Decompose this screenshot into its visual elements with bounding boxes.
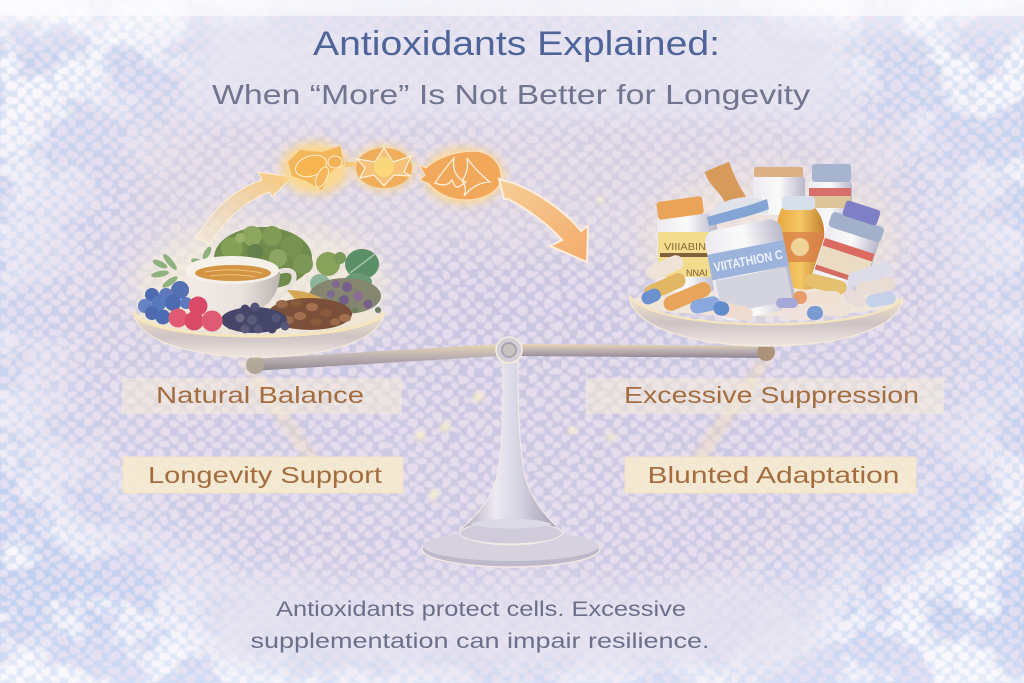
label: Blunted Adaptation: Blunted Adaptation bbox=[648, 462, 900, 488]
label: Excessive Suppression bbox=[586, 378, 944, 414]
arrow: right descending arrow bbox=[499, 179, 588, 262]
coffee beans bbox=[268, 298, 352, 330]
subtitle: When “More” Is Not Better for Longevity bbox=[212, 79, 810, 110]
herbs: rosemary sprig bbox=[151, 245, 216, 290]
left pan: natural foods bbox=[132, 225, 392, 357]
scale: stand, base and beam bbox=[246, 337, 775, 567]
icon: seed cluster bbox=[281, 142, 349, 194]
dark berries bbox=[221, 302, 290, 334]
arrow: left glowing arc bbox=[196, 172, 292, 244]
light rays under the labels bbox=[236, 360, 772, 458]
connector bbox=[345, 162, 361, 167]
arrow: transformation arc from food to supplements bbox=[196, 142, 588, 262]
bottle: red label back right bbox=[808, 164, 852, 240]
stand column bbox=[460, 362, 560, 545]
bottle: purple cap tilted bbox=[810, 197, 890, 296]
icon: cell with crossed strands bbox=[419, 148, 504, 204]
raspberries bbox=[168, 296, 222, 332]
label: Natural Balance: Natural Balance bbox=[156, 382, 364, 408]
beam pivot bbox=[496, 337, 522, 363]
label: Natural Balance bbox=[122, 378, 402, 414]
back of left dish bbox=[134, 304, 384, 332]
footer caption bbox=[250, 598, 710, 653]
glow behind bottles bbox=[640, 170, 900, 320]
beam end left bbox=[246, 356, 264, 374]
bottle: orange cap yellow label: NNAI bbox=[686, 268, 708, 278]
icon: star cell bbox=[354, 146, 414, 190]
label: Longevity Support bbox=[123, 457, 403, 493]
bottle: orange cap yellow label: VIIIABIN bbox=[664, 242, 706, 253]
right dish bbox=[629, 295, 903, 346]
title: Antioxidants Explained: bbox=[313, 25, 720, 63]
capsules left bbox=[639, 253, 754, 322]
right pan: supplement bottles bbox=[629, 160, 903, 346]
bottle: orange cap yellow label bbox=[656, 196, 717, 292]
label: Blunted Adaptation bbox=[625, 457, 916, 493]
back of right dish bbox=[630, 288, 902, 316]
label: Excessive Suppression: Excessive Suppression bbox=[624, 382, 919, 408]
bottle: Vitamin C main jar bbox=[703, 160, 797, 323]
base disc bbox=[422, 531, 600, 567]
greens: broccoli bbox=[214, 226, 379, 294]
label: Longevity Support: Longevity Support bbox=[148, 462, 383, 488]
beam end right bbox=[757, 343, 775, 361]
seed pod behind coffee bbox=[287, 290, 334, 307]
bottle: amber bbox=[777, 196, 824, 290]
glow behind food bbox=[132, 225, 392, 345]
tea cup bbox=[185, 256, 294, 312]
herbs: purple thyme bbox=[309, 278, 381, 314]
left dish bbox=[134, 312, 384, 357]
footer caption: Antioxidants protect cells. Excessive bbox=[276, 598, 686, 621]
footer caption: supplementation can impair resilience. bbox=[250, 630, 710, 653]
blueberries bbox=[138, 281, 192, 324]
bottle: white back jar bbox=[753, 167, 805, 215]
beam bbox=[252, 344, 500, 371]
bottle: Vitamin C main jar: VIITATHION C bbox=[712, 247, 784, 275]
capsules right bbox=[776, 260, 897, 320]
